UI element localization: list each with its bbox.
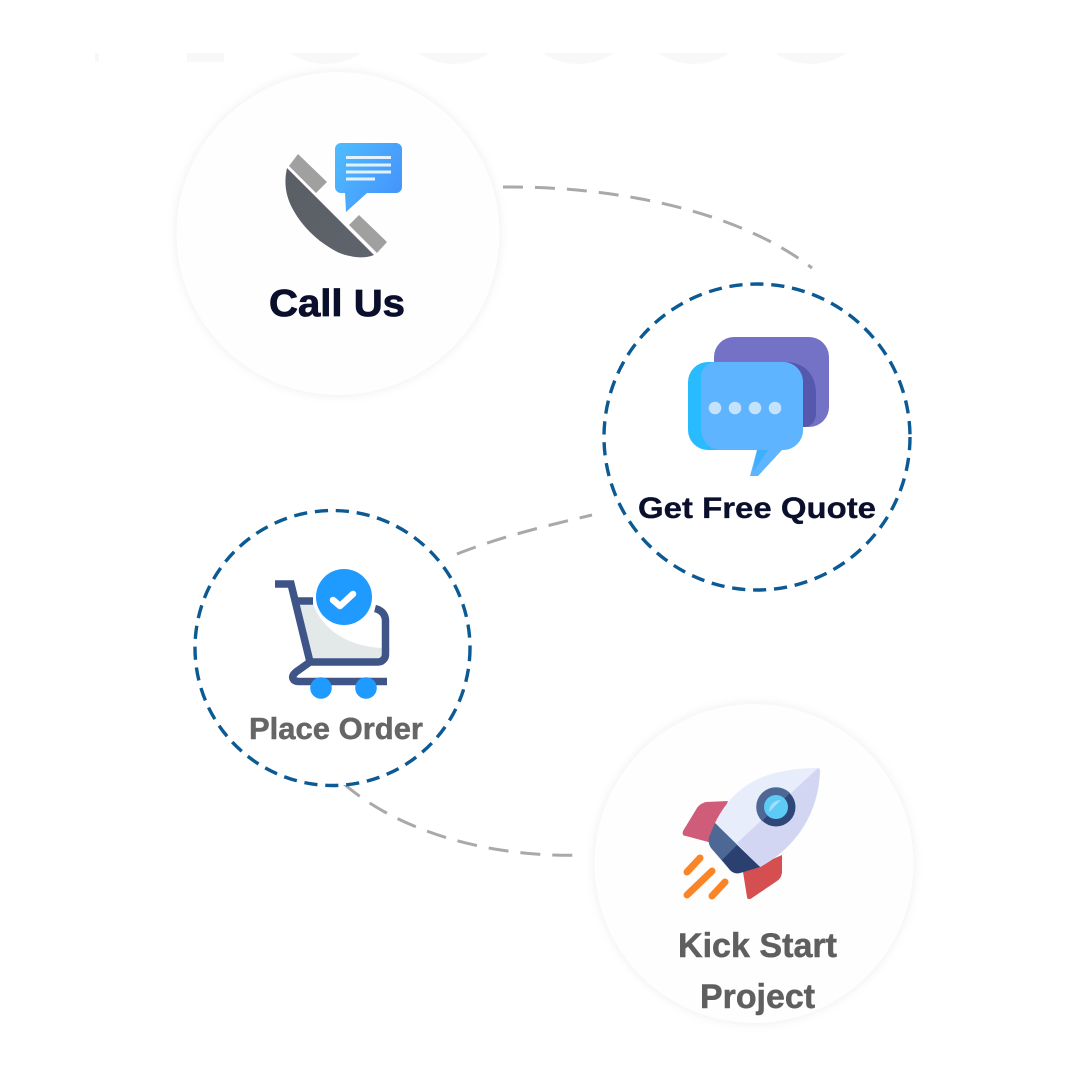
circle plate: Call Us <box>176 72 500 395</box>
dashed ring: Place Order <box>195 510 470 786</box>
label: Kick Start Project <box>678 927 837 1016</box>
connector: Call Us to Get Free Quote <box>503 187 812 268</box>
icon: shopping cart with check badge <box>275 569 387 699</box>
step: Call Us <box>176 72 500 395</box>
icon: phone handset with chat bubble <box>285 143 402 257</box>
icon: rocket <box>683 768 820 899</box>
connector: Get Free Quote to Place Order <box>457 515 592 554</box>
icon: overlapping chat bubbles <box>688 337 829 476</box>
exhaust streaks <box>687 858 725 896</box>
connector: Place Order to Kick Start Project <box>344 784 583 855</box>
label: Call Us: Call Us <box>269 283 405 325</box>
step: Kick Start Project <box>594 704 914 1023</box>
faint clipped shapes along the top edge <box>95 0 875 64</box>
circle plate: Kick Start Project <box>594 704 914 1023</box>
label: Kick Start Project: Project <box>700 978 815 1016</box>
dashed ring: Get Free Quote <box>604 284 910 590</box>
step: Get Free Quote <box>604 284 910 590</box>
step: Place Order <box>195 510 470 786</box>
infographic canvas <box>176 72 914 1024</box>
label: Place Order: Place Order <box>249 711 423 746</box>
label: Kick Start Project: Kick Start <box>678 927 837 965</box>
label: Get Free Quote: Get Free Quote <box>638 492 876 525</box>
